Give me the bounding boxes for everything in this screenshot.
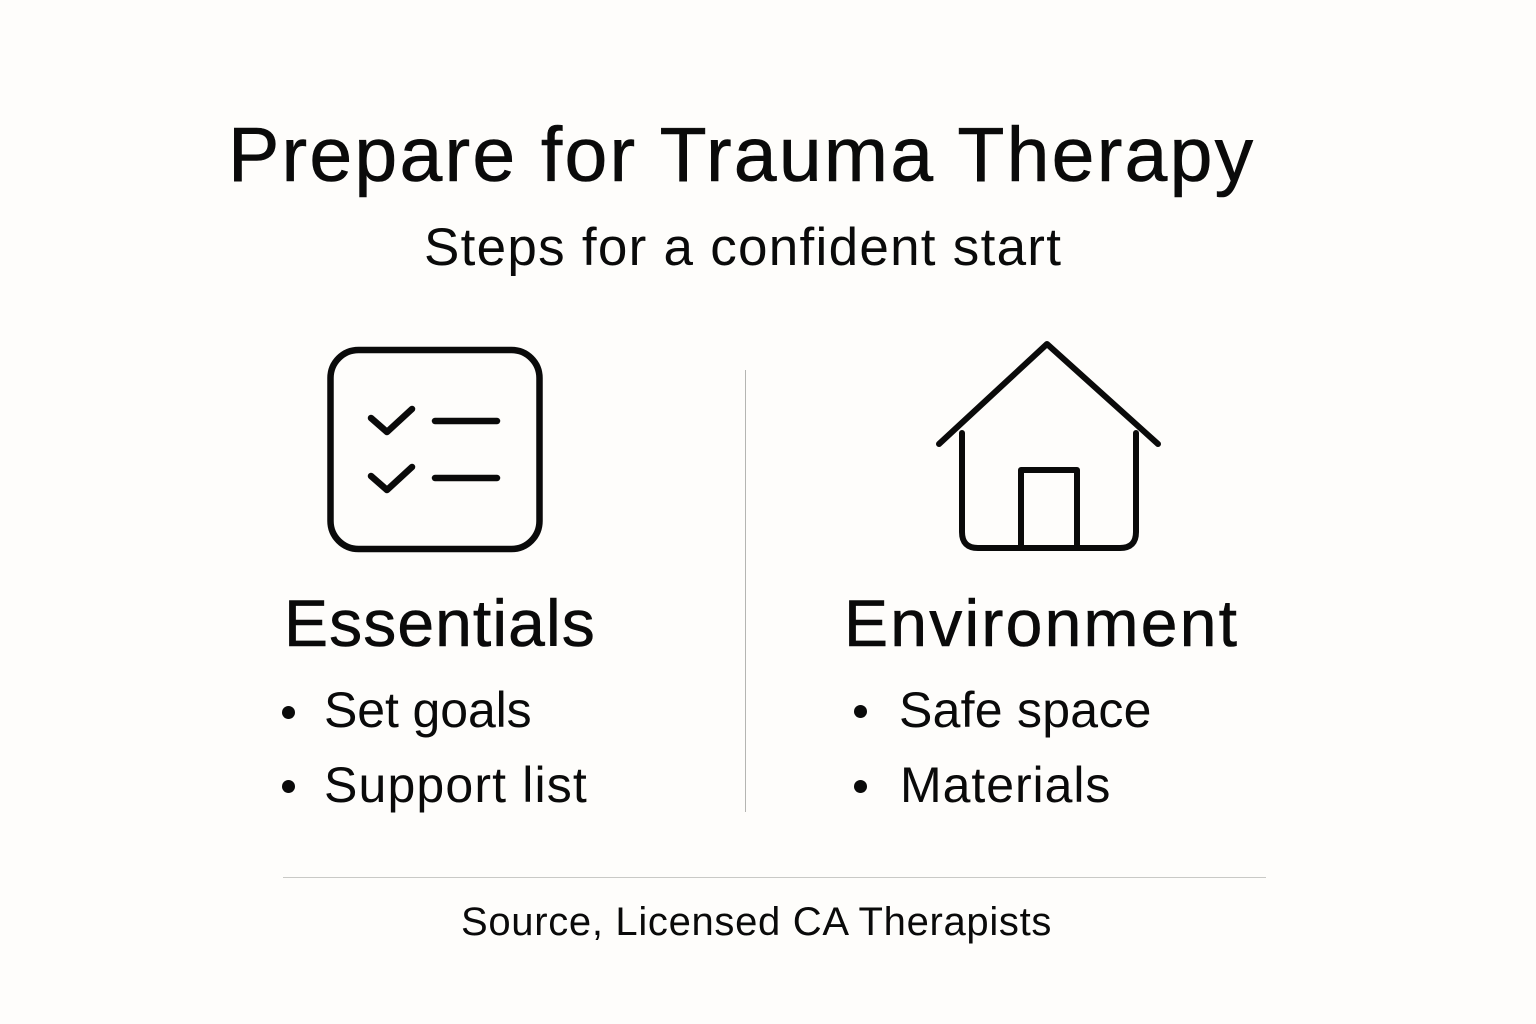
item: materials: Materials [900,757,1111,813]
item: safe space: Safe space [899,682,1152,738]
item: set goals: Set goals [324,682,532,738]
heading: environment: Environment [844,586,1239,660]
title: Prepare for Trauma Therapy [228,112,1255,198]
list: essentials [282,682,588,813]
source line: Source, Licensed CA Therapists [461,900,1052,944]
list: environment [854,682,1152,813]
icon: house [936,341,1161,551]
subtitle: Steps for a confident start [424,218,1062,277]
column divider [745,370,746,812]
bullet: support list [282,780,295,793]
bullet: materials [854,780,867,793]
footer rule [283,877,1266,878]
bullet: safe space [854,705,867,718]
icon: checklist [327,346,543,552]
heading: essentials: Essentials [284,586,596,660]
item: support list: Support list [324,757,588,813]
bullet: set goals [282,706,295,719]
